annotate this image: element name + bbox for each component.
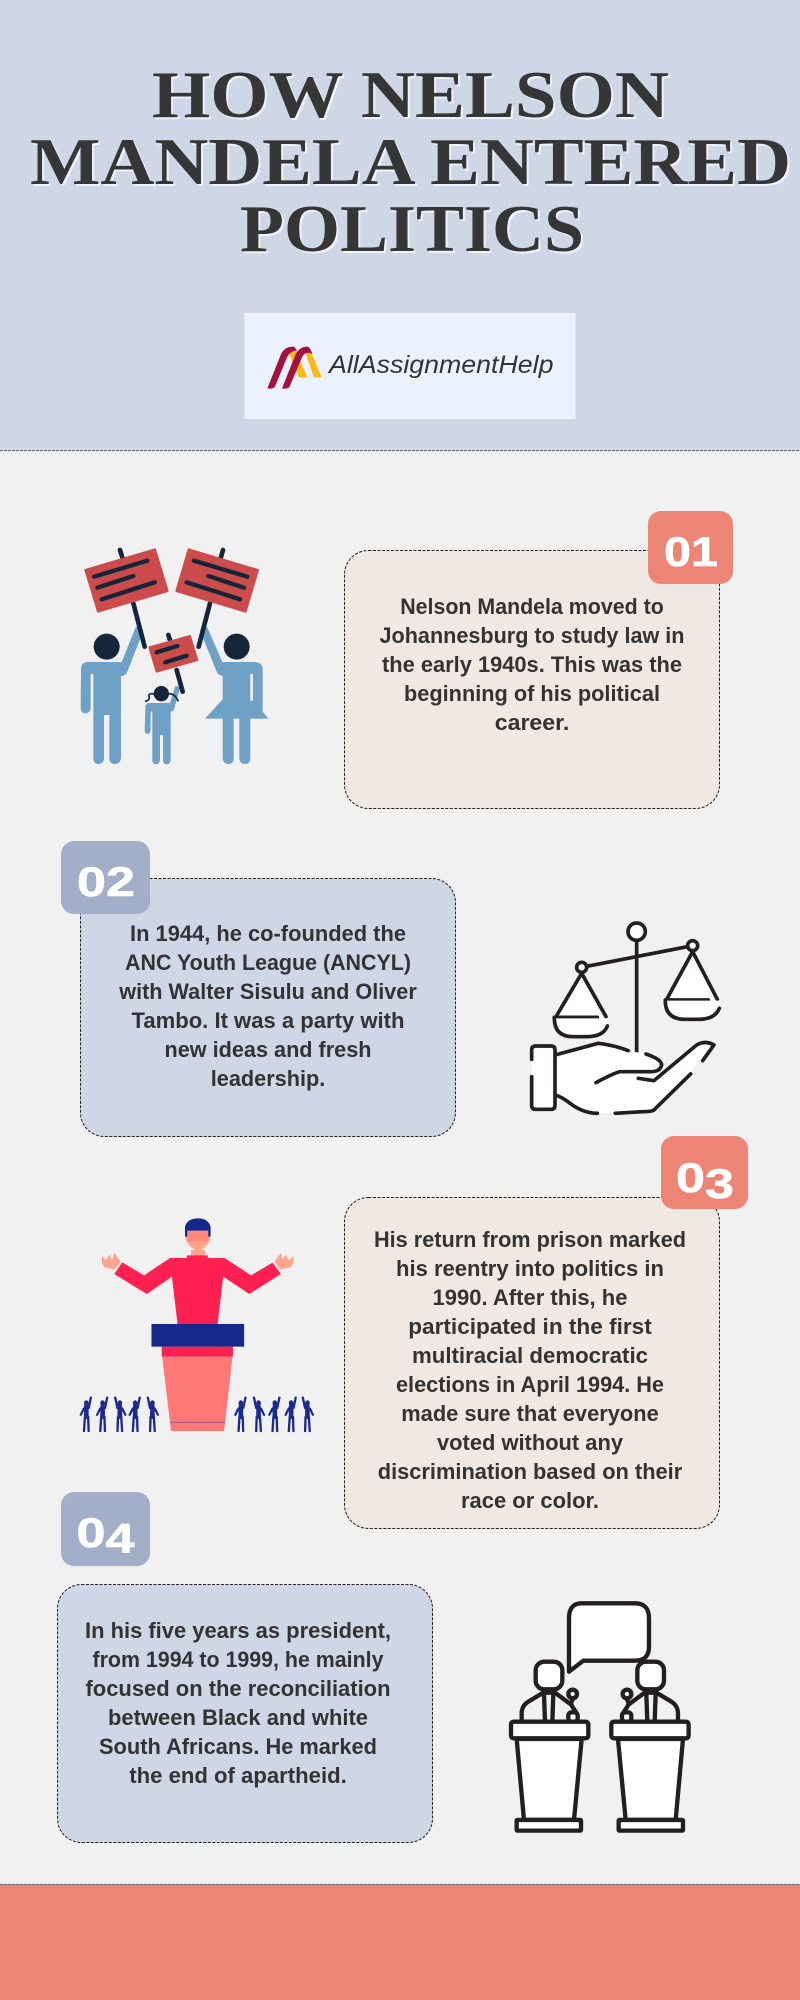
- icon: scales on hand: [532, 923, 719, 1113]
- title: [30, 58, 791, 266]
- number badge 04: 4: [106, 1515, 135, 1562]
- body text: In his five years as president,: [85, 1618, 391, 1643]
- panel: step 01: [344, 511, 733, 808]
- speech bubble: [569, 1603, 649, 1672]
- body text: [380, 594, 684, 735]
- body text: the end of apartheid.: [129, 1763, 347, 1788]
- panel: step 04: [58, 1492, 432, 1842]
- header band: [0, 0, 800, 451]
- card: [80, 878, 456, 1136]
- icon: logo mark: [267, 347, 322, 389]
- body text: voted without any: [437, 1430, 624, 1455]
- number badge 04: [61, 1492, 150, 1566]
- body text: Tambo. It was a party with: [132, 1008, 404, 1033]
- crowd: [81, 1397, 313, 1431]
- body text: South Africans. He marked: [99, 1734, 377, 1759]
- logo: [244, 313, 576, 419]
- body text: new ideas and fresh: [164, 1037, 372, 1062]
- body text: Nelson Mandela moved to: [400, 594, 664, 619]
- icon: two speakers debating: [511, 1603, 689, 1831]
- card: [344, 1198, 720, 1528]
- body text: made sure that everyone: [401, 1401, 659, 1426]
- body text: with Walter Sisulu and Oliver: [118, 979, 417, 1004]
- body text: discrimination based on their: [378, 1459, 683, 1484]
- body text: 1990. After this, he: [432, 1285, 628, 1310]
- body text: race or color.: [461, 1488, 599, 1513]
- title: MANDELA ENTERED: [30, 125, 791, 199]
- card: [58, 1584, 432, 1842]
- number badge 02: 02: [77, 858, 135, 905]
- speaker torso: [114, 1255, 281, 1324]
- panel: step 03: [344, 1136, 748, 1528]
- body text: the early 1940s. This was the: [382, 652, 682, 677]
- number badge 03: 0: [676, 1154, 699, 1201]
- title: HOW NELSON: [152, 58, 669, 132]
- podium: [151, 1324, 244, 1431]
- body text: His return from prison marked: [374, 1227, 686, 1252]
- card: [344, 550, 720, 808]
- right speaker: [611, 1662, 689, 1831]
- icon: speaker at podium with crowd: [81, 1218, 313, 1431]
- body text: Johannesburg to study law in: [380, 623, 684, 648]
- body text: career.: [495, 710, 569, 735]
- speaker head: [185, 1218, 211, 1256]
- body text: his reentry into politics in: [396, 1256, 664, 1281]
- speaker hands: [102, 1253, 294, 1269]
- body text: between Black and white: [108, 1705, 368, 1730]
- body text: [374, 1227, 686, 1513]
- panel: step 02: [61, 841, 456, 1136]
- body text: ANC Youth League (ANCYL): [125, 950, 411, 975]
- body text: elections in April 1994. He: [396, 1372, 664, 1397]
- number badge 02: [61, 841, 150, 914]
- body text: from 1994 to 1999, he mainly: [92, 1647, 384, 1672]
- body text: focused on the reconciliation: [86, 1676, 390, 1701]
- body text: multiracial democratic: [412, 1343, 648, 1368]
- number badge 04: 0: [76, 1509, 100, 1556]
- number badge 01: [648, 511, 733, 584]
- logo wordmark: AllAssignmentHelp: [327, 351, 554, 379]
- left speaker: [511, 1662, 588, 1831]
- body text: [85, 1618, 391, 1788]
- body text: [118, 921, 417, 1091]
- number badge 03: [661, 1136, 748, 1209]
- number badge 01: 01: [664, 528, 718, 575]
- body text: participated in the first: [408, 1314, 652, 1339]
- body text: leadership.: [211, 1066, 325, 1091]
- body text: In 1944, he co-founded the: [130, 921, 406, 946]
- number badge 03: 3: [705, 1160, 734, 1207]
- footer band: [0, 1884, 800, 2000]
- icon: protest family: [81, 549, 268, 764]
- title: POLITICS: [240, 192, 584, 266]
- body text: beginning of his political: [404, 681, 660, 706]
